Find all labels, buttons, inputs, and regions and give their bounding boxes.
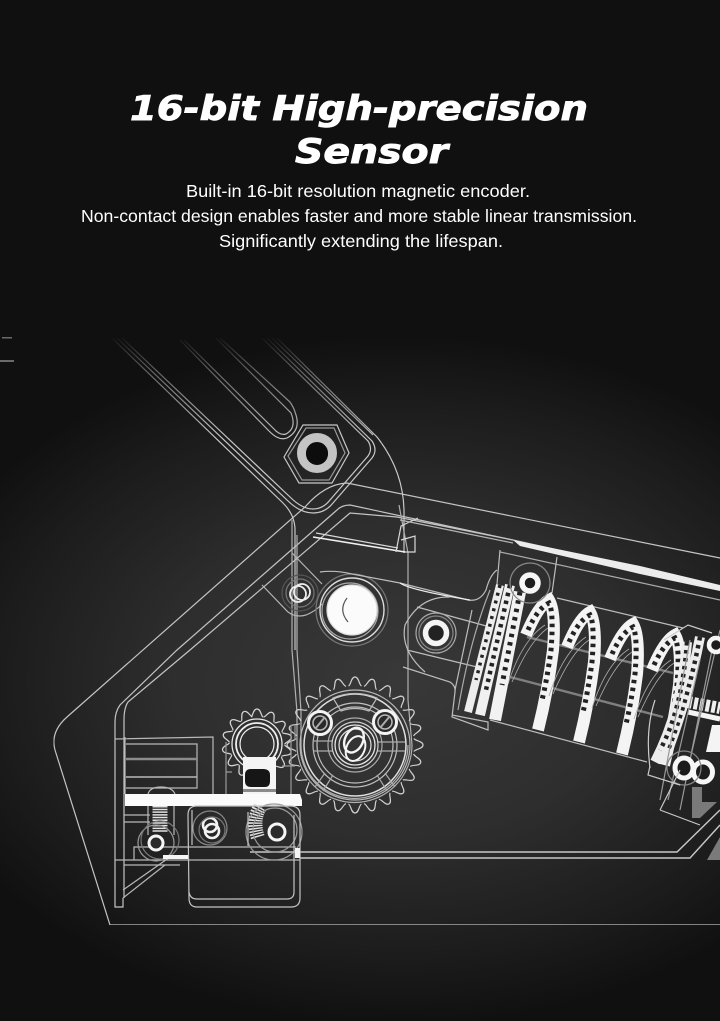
main white bearing	[316, 574, 388, 646]
description text: Non-contact design enables faster and more stable linear transmission.	[81, 206, 637, 226]
description text	[81, 181, 637, 251]
white horizontal bar	[125, 794, 302, 806]
small white accents	[163, 848, 300, 859]
title: Sensor	[295, 132, 451, 172]
lower rounded box	[188, 806, 300, 907]
outer body outline	[54, 483, 720, 925]
bracket base shadow	[243, 789, 276, 792]
bracket hole backing	[244, 768, 271, 788]
main frame uprights	[292, 505, 412, 802]
dense spring left	[458, 585, 520, 720]
title: 16-bit High-precision	[130, 89, 588, 129]
lower parallel rail	[500, 552, 720, 600]
gear bolts	[308, 710, 396, 734]
piston rod body	[320, 550, 683, 762]
background glow panel	[0, 335, 720, 1021]
rod eye	[416, 613, 456, 653]
spring bolts	[510, 563, 720, 785]
white upper rail	[513, 540, 720, 591]
large gear	[287, 677, 423, 813]
lower screws	[138, 804, 302, 861]
spring coils	[508, 600, 680, 765]
grey bracket fragments	[692, 787, 720, 860]
small gear support lines	[226, 725, 295, 794]
hex nut	[284, 425, 349, 483]
pivot kite and small pivot	[262, 553, 322, 616]
dense spring right	[648, 625, 712, 768]
title	[130, 89, 588, 172]
small gear	[221, 709, 292, 779]
right hatched mechanism	[660, 630, 720, 810]
upper arm	[112, 338, 404, 650]
mechanical wireframe diagram	[54, 338, 720, 925]
lower right housing	[250, 766, 720, 858]
white bracket	[243, 757, 276, 794]
description text: Built-in 16-bit resolution magnetic encoder.	[186, 181, 530, 201]
stray marks at left edge	[0, 337, 14, 362]
tab and top inner rail	[313, 518, 513, 552]
left stacked box	[115, 737, 300, 898]
description text: Significantly extending the lifespan.	[219, 231, 503, 251]
